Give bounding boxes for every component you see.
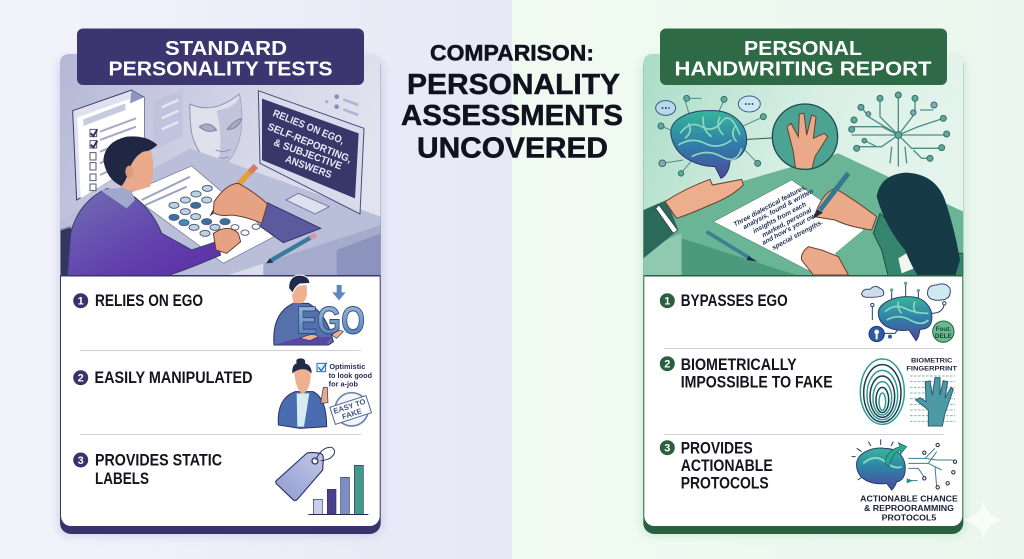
person: torso and arm [60,136,321,277]
panel: personal handwriting report [640,28,967,537]
header: personal handwriting report: PERSONAL [744,37,862,60]
icon: brain reprogramming circuit: & REPROORAMMING [864,504,954,513]
list item 1: bypasses ego: BYPASSES EGO [681,292,788,310]
handwritten page: and how's your own [761,211,821,247]
second pencil [266,235,316,263]
list item 3: provides actionable protocols: PROVIDES [681,439,753,457]
icon: woman with easy to fake stamp: FAKE [341,407,363,421]
list item 3: provides static labels: LABELS [95,470,149,488]
header: standard personality tests: STANDARD [165,37,287,60]
handwritten page: special strengths. [771,219,824,252]
list item 3: provides static labels: PROVIDES STATIC [95,452,222,470]
list item 3: provides actionable protocols [660,439,773,492]
list item 3: provides static labels: 3 [78,455,84,467]
list item 1: relies on ego: RELIES ON EGO [95,292,203,310]
desk [119,148,380,275]
icon: brain with clouds [862,282,954,342]
header: personal handwriting report [660,28,947,85]
icon: fingerprint and biometric hand: BIOMETRIC [911,357,953,364]
illustration: person taking a test [60,54,381,277]
monitor text: RELIES ON EGO, [271,108,346,147]
checklist document [73,90,144,200]
hand in circle [772,104,838,170]
icon: brain reprogramming circuit: PROTOCOL5 [882,514,937,523]
list item 1: bypasses ego: 1 [664,296,670,308]
title: PERSONALITY [407,69,620,101]
pencil in hand [209,166,267,223]
icon: woman with easy to fake stamp: for a-job [329,380,359,389]
handwritten page: Three dialectical features, [733,184,808,228]
monitor text [268,109,350,178]
list item 2: biometrically impossible to fake: IMPOSSIBLE TO FAKE [681,374,833,392]
panel: standard personality tests [57,28,384,537]
background: left half [0,0,512,559]
handwritten page [713,180,877,274]
handwritten page: analysis, found & written [742,188,815,231]
list item 2: easily manipulated: 2 [78,373,84,385]
pen on desk [707,232,758,262]
test answer sheet [128,166,274,263]
list item 2: easily manipulated: EASILY MANIPULATED [94,369,253,387]
list item 3: provides actionable protocols: 3 [664,443,670,455]
panel base [643,54,963,534]
background: right half [512,0,1024,559]
circuit tree [849,92,950,167]
monitor text: & SUBJECTIVE [272,138,343,172]
list item 3: provides actionable protocols: PROTOCOLS [681,474,769,492]
header: personal handwriting report: HANDWRITING REPORT [674,58,932,80]
mask [190,94,242,165]
icon: person holding ego [274,275,365,345]
monitor [258,91,364,214]
handwritten page: marked, personal [761,207,813,239]
icon: woman with easy to fake stamp: to look good [329,371,372,380]
brain with nodes [656,95,766,178]
icon: woman with easy to fake stamp: EASY TO [332,397,367,416]
list item 1: relies on ego: 1 [78,296,84,308]
icon: brain reprogramming circuit [852,439,959,523]
woman writing [801,173,963,277]
icon: tag and bar chart [276,447,368,515]
handwritten page: insights from each [752,201,808,235]
icon: person holding ego: EGO [297,298,365,342]
list item 2: biometrically impossible to fake [660,356,833,392]
title: UNCOVERED [417,132,608,164]
header: standard personality tests [77,28,364,85]
icon: fingerprint and biometric hand: FINGERPRINT [906,365,957,372]
panel base [60,54,381,534]
title [401,41,623,165]
icon: woman with easy to fake stamp [278,358,372,428]
monitor text: ANSWERS [283,154,333,181]
decorative sparkle [963,500,1003,540]
header: standard personality tests: PERSONALITY TESTS [108,58,332,80]
icon: woman with easy to fake stamp: Optimistic [329,362,365,371]
list item 3: provides static labels [73,452,222,488]
list item 2: biometrically impossible to fake: 2 [664,359,670,371]
icon: brain reprogramming circuit: ACTIONABLE CHANCE [860,495,959,504]
icon: fingerprint and biometric hand [860,357,957,426]
desk [643,153,963,277]
list item 3: provides actionable protocols: ACTIONABLE [681,457,773,475]
monitor text: SELF-REPORTING, [266,122,353,166]
illustration: handwriting analysis [643,54,964,277]
title: COMPARISON: [430,41,594,66]
icon: brain with clouds: Fout. [936,326,951,333]
title: ASSESSMENTS [401,100,623,132]
faded list [153,89,183,150]
icon: brain with clouds: DELE [935,333,952,340]
reaching hand [643,179,743,258]
list item 2: biometrically impossible to fake: BIOMETRICALLY [681,356,797,374]
